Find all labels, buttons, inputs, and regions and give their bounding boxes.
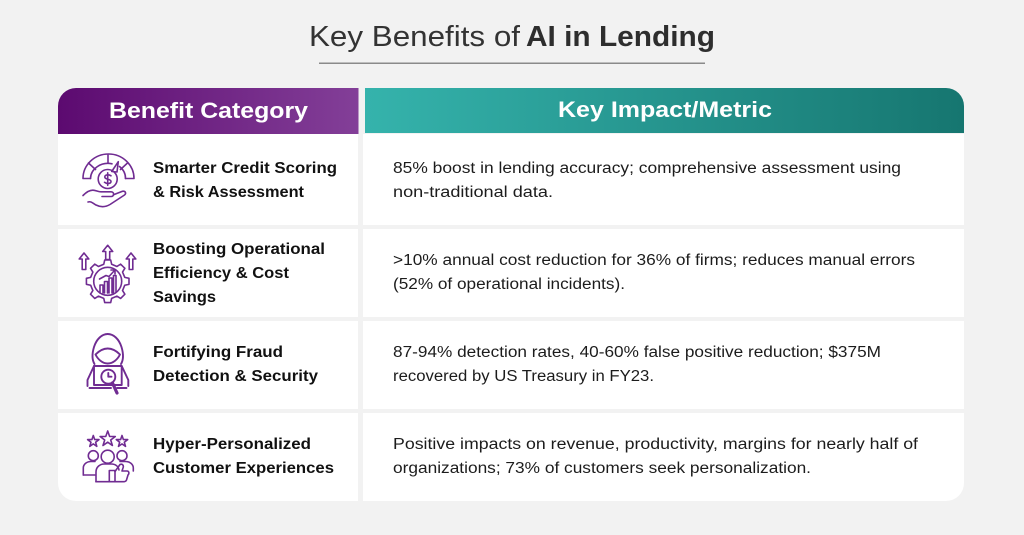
metric text: 87-94% detection rates, 40-60% false positive reduction; $375M [393,344,881,361]
category text [153,436,334,477]
title [309,21,715,53]
category text: Efficiency & Cost [153,265,289,282]
icon: hooded figure with laptop and magnifier [88,334,128,393]
metric text: organizations; 73% of customers seek personalization. [393,460,811,477]
row 2: operational efficiency [58,229,964,317]
category text [153,160,337,201]
category text [153,344,318,385]
metric text: non-traditional data. [393,184,553,201]
header: Key Impact/Metric [365,88,964,133]
category text: Savings [153,289,216,306]
category text: & Risk Assessment [153,184,304,201]
metric text: >10% annual cost reduction for 36% of firms; reduces manual errors [393,252,915,269]
metric text [393,160,901,201]
metric text [393,252,915,293]
row 3: fraud detection [58,321,964,409]
category text: Hyper-Personalized [153,436,311,453]
category text: Customer Experiences [153,460,334,477]
row 1: credit scoring [58,134,964,225]
metric text [393,344,881,385]
category text: Detection & Security [153,368,318,385]
row 4: personalization [58,413,964,501]
metric text: Positive impacts on revenue, productivity, margins for nearly half of [393,436,919,453]
category text [153,241,325,306]
category text: Smarter Credit Scoring [153,160,337,177]
header: Benefit Category: Benefit Category [109,98,309,123]
icon: gear with chart and arrows [79,245,136,303]
icon: customers with stars and thumbs up [83,431,133,482]
header: Benefit Category [58,88,358,134]
title: AI in Lending [526,21,715,53]
category text: Fortifying Fraud [153,344,283,361]
icon: credit gauge with dollar and hand [83,154,134,207]
metric text: (52% of operational incidents). [393,276,625,293]
category text: Boosting Operational [153,241,325,258]
metric text [393,436,919,477]
header: Key Impact/Metric: Key Impact/Metric [558,97,772,122]
title: Key Benefits of [309,21,521,53]
metric text: 85% boost in lending accuracy; comprehensive assessment using [393,160,901,177]
metric text: recovered by US Treasury in FY23. [393,368,654,385]
